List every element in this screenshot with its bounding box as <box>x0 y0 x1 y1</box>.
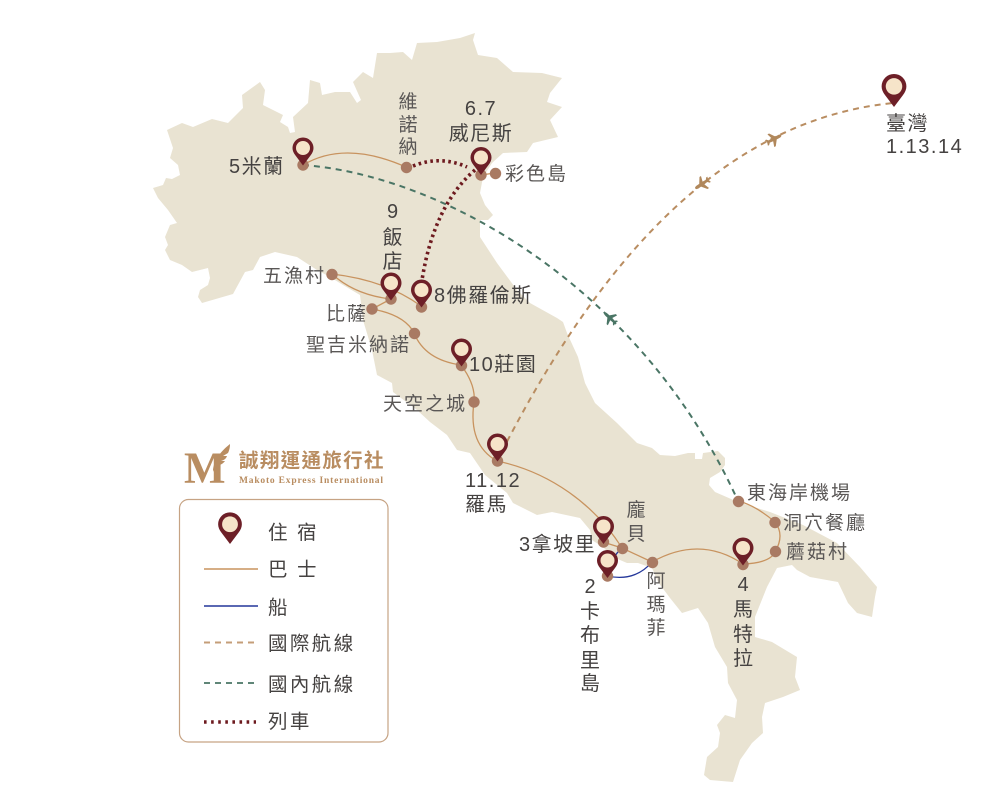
label: hotel 9: 飯 <box>382 226 402 249</box>
label: Capri <box>580 576 600 695</box>
logo english name: Makoto Express International <box>239 476 383 486</box>
label: Matera <box>733 574 753 670</box>
legend text: lodging: 住 <box>268 522 290 544</box>
label: Florence: 8佛羅倫斯 <box>434 284 533 307</box>
label: Rome <box>465 470 521 516</box>
label: estate 10: 10莊園 <box>469 353 537 376</box>
label: San Gimignano: 聖吉米納諾 <box>306 334 411 356</box>
pin: Venice <box>470 147 492 175</box>
label: Verona <box>398 91 418 158</box>
label: Matera: 馬 <box>733 599 753 621</box>
domestic flight route <box>303 165 738 501</box>
icon: airplane return <box>691 173 713 194</box>
pin: hotel 9 <box>380 272 402 300</box>
label: Matera: 拉 <box>733 647 753 670</box>
label: Verona: 維 <box>398 91 418 113</box>
label: Amalfi: 瑪 <box>646 595 666 616</box>
legend line: boat <box>204 605 258 607</box>
legend text: domestic flight: 國內航線 <box>268 674 356 696</box>
label: Verona: 諾 <box>398 114 418 136</box>
legend text: bus <box>268 559 319 581</box>
label: Naples: 3拿坡里 <box>519 532 596 556</box>
legend text: lodging <box>268 522 319 544</box>
pin: Capri <box>597 550 618 578</box>
label: hotel 9 <box>382 201 402 273</box>
label: Capri: 卡 <box>580 600 600 623</box>
logo mark: M <box>184 444 226 492</box>
label: Pompeii: 龐 <box>626 499 646 521</box>
label: Milan: 5米蘭 <box>229 155 285 178</box>
label: Taiwan: 臺灣 <box>886 112 929 135</box>
legend text: bus: 巴 <box>268 559 290 581</box>
pin: Florence <box>411 280 432 308</box>
logo <box>184 444 385 492</box>
label: Verona: 納 <box>398 136 418 158</box>
label: Venice <box>449 98 513 145</box>
label: Matera: 特 <box>733 623 753 646</box>
legend text: boat: 船 <box>268 597 290 619</box>
label: east coast airport: 東海岸機場 <box>747 482 852 504</box>
label: Capri: 2 <box>584 576 596 598</box>
pin: estate 10 <box>451 338 472 366</box>
pin: Naples <box>593 516 614 544</box>
label: Pompeii: 貝 <box>626 524 646 545</box>
label: cave restaurant: 洞穴餐廳 <box>783 512 867 534</box>
label: Civita: 天空之城 <box>383 393 467 415</box>
pin: Rome <box>487 434 508 462</box>
label: Burano: 彩色島 <box>505 163 568 185</box>
label: Venice: 6.7 <box>465 98 497 120</box>
label: Capri: 島 <box>580 672 600 695</box>
label: hotel 9: 店 <box>382 250 402 273</box>
legend: lodging pin <box>218 512 242 544</box>
label: Amalfi <box>646 570 666 639</box>
legend text: international flight: 國際航線 <box>268 633 356 655</box>
pin: Matera <box>732 538 754 566</box>
label: Capri: 里 <box>580 650 600 672</box>
label: Venice: 威尼斯 <box>449 122 513 145</box>
label: hotel 9: 9 <box>387 201 398 223</box>
icon: airplane outbound <box>763 129 785 149</box>
legend panel <box>180 500 388 742</box>
label: mushroom village: 蘑菇村 <box>786 541 849 563</box>
bus routes <box>303 153 780 564</box>
label: Taiwan: 1.13.14 <box>886 136 963 158</box>
map of Italy <box>153 33 877 782</box>
legend line: domestic flight <box>204 682 258 684</box>
label: Taiwan <box>886 112 963 158</box>
label: Rome: 羅馬 <box>465 494 508 516</box>
label: Capri: 布 <box>580 624 600 647</box>
label: Rome: 11.12 <box>465 470 521 492</box>
label: Matera: 4 <box>737 574 749 596</box>
legend text: train: 列車 <box>268 711 312 733</box>
label: Cinque Terre: 五漁村 <box>263 265 326 287</box>
legend text: lodging: 宿 <box>297 522 319 544</box>
route stop dots <box>297 159 781 582</box>
legend line: train <box>204 720 256 724</box>
international flight route <box>497 103 893 461</box>
legend line: international flight <box>204 642 258 644</box>
logo name: 誠翔運通旅行社 <box>239 449 385 472</box>
label: Pisa: 比薩 <box>326 303 368 325</box>
boat routes <box>607 548 652 577</box>
legend line: bus <box>204 568 258 570</box>
pin: Taiwan <box>882 74 906 107</box>
label: Pompeii <box>626 499 646 545</box>
icon: airplane domestic <box>600 308 621 328</box>
legend text: bus: 士 <box>297 559 319 581</box>
train routes <box>413 161 475 280</box>
pin: Milan <box>292 138 314 166</box>
label: Amalfi: 阿 <box>646 570 666 592</box>
label: Amalfi: 菲 <box>646 617 666 639</box>
